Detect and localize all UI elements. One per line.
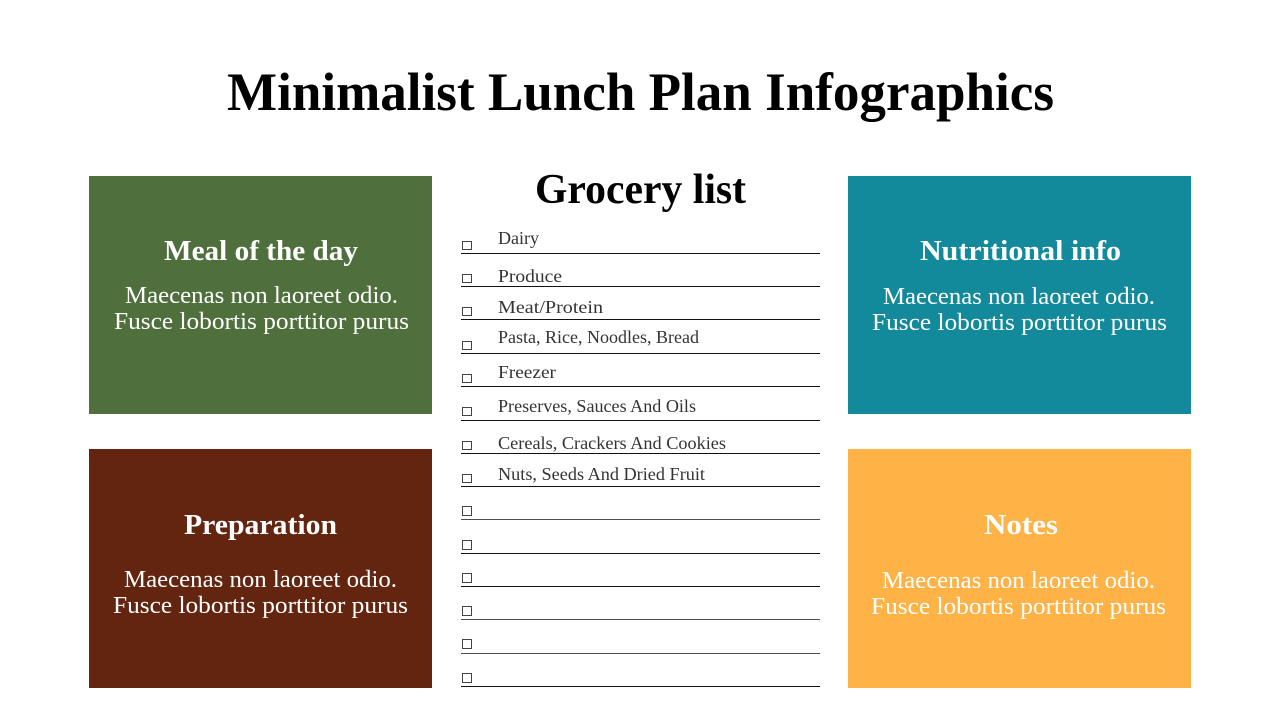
- checklist row: blank 5: [461, 640, 820, 654]
- text block: nutritional info: [872, 284, 1167, 336]
- text block: notes: Maecenas non laoreet odio.: [882, 568, 1155, 594]
- checklist row: blank 2: [461, 540, 820, 554]
- checklist row: blank 1: [461, 506, 820, 520]
- checklist row: dairy: [461, 228, 820, 254]
- checklist row: meat/protein: [461, 297, 820, 320]
- text block: meal of the day: [114, 283, 409, 335]
- checklist row: blank 6: [461, 674, 820, 686]
- text block: notes: [871, 568, 1166, 620]
- panel: nutritional info: [848, 176, 1191, 414]
- text block: meal of the day: Fusce lobortis porttitor purus: [114, 309, 409, 335]
- text block: preparation: [113, 567, 408, 619]
- panel: meal of the day: [89, 176, 432, 414]
- checklist row: meat/protein: Meat/Protein: [498, 297, 603, 317]
- checklist row: blank 4: [461, 606, 820, 620]
- checklist row: nuts, seeds and dried fruit: Nuts, Seeds And Dried Fruit: [498, 464, 705, 484]
- checklist row: freezer: [461, 362, 820, 386]
- panel: preparation: [89, 449, 432, 688]
- panel: notes: [848, 449, 1191, 688]
- heading: notes: Notes: [984, 509, 1058, 541]
- checklist row: nuts, seeds and dried fruit: [461, 464, 820, 486]
- checklist row: preserves, sauces and oils: [461, 396, 820, 420]
- text block: notes: Fusce lobortis porttitor purus: [871, 594, 1166, 620]
- text block: preparation: Maecenas non laoreet odio.: [124, 567, 397, 593]
- title: Minimalist Lunch Plan Infographics: [227, 62, 1054, 122]
- checklist row: produce: Produce: [498, 266, 562, 286]
- checklist row: pasta, rice, noodles, bread: Pasta, Rice, Noodles, Bread: [498, 327, 699, 347]
- checklist row: produce: [461, 266, 820, 286]
- heading: grocery list: Grocery list: [535, 167, 746, 213]
- panel: grocery list: [461, 167, 820, 686]
- checklist row: cereals, crackers and cookies: [461, 433, 820, 454]
- checklist row: freezer: Freezer: [498, 362, 556, 382]
- checklist row: cereals, crackers and cookies: Cereals, Crackers And Cookies: [498, 433, 726, 453]
- heading: nutritional info: Nutritional info: [920, 235, 1121, 267]
- checklist row: dairy: Dairy: [498, 228, 539, 248]
- checklist row: preserves, sauces and oils: Preserves, Sauces And Oils: [498, 396, 696, 416]
- text block: nutritional info: Fusce lobortis porttitor purus: [872, 310, 1167, 336]
- checklist row: blank 3: [461, 574, 820, 586]
- checklist row: pasta, rice, noodles, bread: [461, 327, 820, 354]
- heading: meal of the day: Meal of the day: [164, 235, 358, 267]
- text block: nutritional info: Maecenas non laoreet odio.: [883, 284, 1155, 310]
- text block: preparation: Fusce lobortis porttitor purus: [113, 593, 408, 619]
- heading: preparation: Preparation: [184, 509, 337, 541]
- text block: meal of the day: Maecenas non laoreet odio.: [125, 283, 398, 309]
